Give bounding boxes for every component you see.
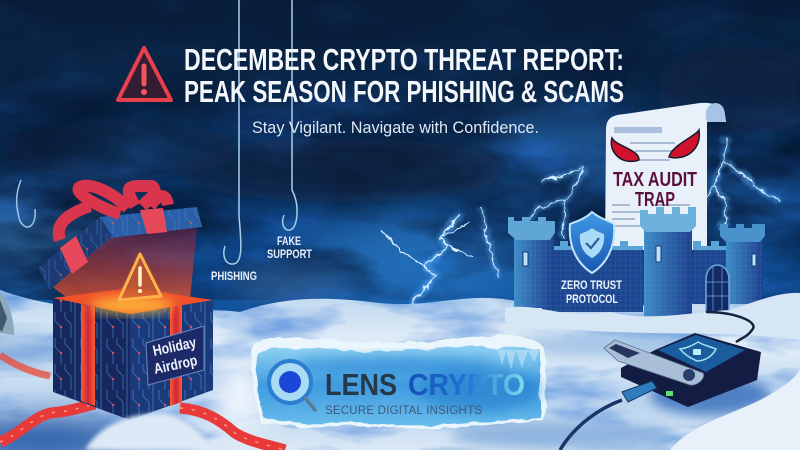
right lightning bolt <box>700 136 780 230</box>
magnifier icon <box>269 361 315 410</box>
lightning bolts <box>380 136 780 326</box>
glow inside lid <box>50 227 197 300</box>
box left face <box>53 298 130 420</box>
bow <box>59 186 168 240</box>
label: phishing: PHISHING <box>211 269 257 283</box>
lid ribbon <box>60 208 167 274</box>
lens crypto wordmark: LENS <box>325 367 397 402</box>
fishing hook: phishing <box>224 0 241 264</box>
document text lines <box>614 127 662 133</box>
centre lightning bolt <box>380 212 474 326</box>
box right face <box>130 300 213 420</box>
shield with check <box>570 212 614 273</box>
title: DECEMBER CRYPTO THREAT REPORT: <box>184 42 624 77</box>
label: fake support: FAKE <box>277 234 301 248</box>
tower windows <box>523 246 756 266</box>
zero trust castle <box>508 207 765 318</box>
metal swivel <box>604 340 704 385</box>
hardware wallet <box>560 312 761 450</box>
left castle lightning bolt <box>480 168 586 278</box>
upper cable <box>706 312 754 342</box>
usb plug <box>622 381 657 402</box>
left tower <box>514 235 554 308</box>
gate <box>706 265 729 312</box>
evil eyes <box>611 130 699 161</box>
icicles <box>498 350 540 370</box>
device body <box>621 333 761 407</box>
lens crypto ice logo <box>252 335 546 428</box>
zero trust protocol label: PROTOCOL <box>566 292 618 306</box>
wall battlements <box>542 241 745 250</box>
ice block <box>252 335 546 428</box>
box opening glow <box>53 288 213 314</box>
holiday airdrop label: Airdrop <box>152 352 199 378</box>
glowing ribbon on box <box>81 304 182 406</box>
tagline: SECURE DIGITAL INSIGHTS <box>325 405 482 417</box>
holiday airdrop label: Holiday <box>151 334 198 360</box>
status led <box>666 391 673 396</box>
tax audit trap text: TRAP <box>635 189 675 211</box>
warning triangle <box>119 254 161 300</box>
label: fake support: SUPPORT <box>267 247 313 261</box>
holiday airdrop label <box>146 326 204 385</box>
snow field <box>0 285 800 450</box>
fishing hook: left <box>17 180 35 227</box>
lid <box>38 207 202 290</box>
gift box <box>38 186 213 420</box>
tax audit trap text: TAX AUDIT <box>613 169 697 191</box>
zero trust protocol label: ZERO TRUST <box>561 278 623 292</box>
snow mound in front of gift box <box>85 414 215 450</box>
title: PEAK SEASON FOR PHISHING & SCAMS <box>184 74 624 109</box>
snow drift at castle base <box>505 293 800 340</box>
circuit texture <box>53 298 213 420</box>
castle walls <box>542 246 745 312</box>
lower cable <box>560 400 622 450</box>
warning icon: title <box>118 48 171 100</box>
right tower <box>726 238 763 304</box>
red circuit trails <box>0 355 285 450</box>
subtitle: Stay Vigilant. Navigate with Confidence. <box>252 118 539 137</box>
tax audit document <box>605 103 726 250</box>
middle tower <box>644 228 692 318</box>
lens crypto wordmark: CRYPTO <box>408 367 525 402</box>
device screen <box>658 335 745 372</box>
fishing hook: fake support <box>283 0 297 230</box>
castle texture <box>514 232 763 318</box>
